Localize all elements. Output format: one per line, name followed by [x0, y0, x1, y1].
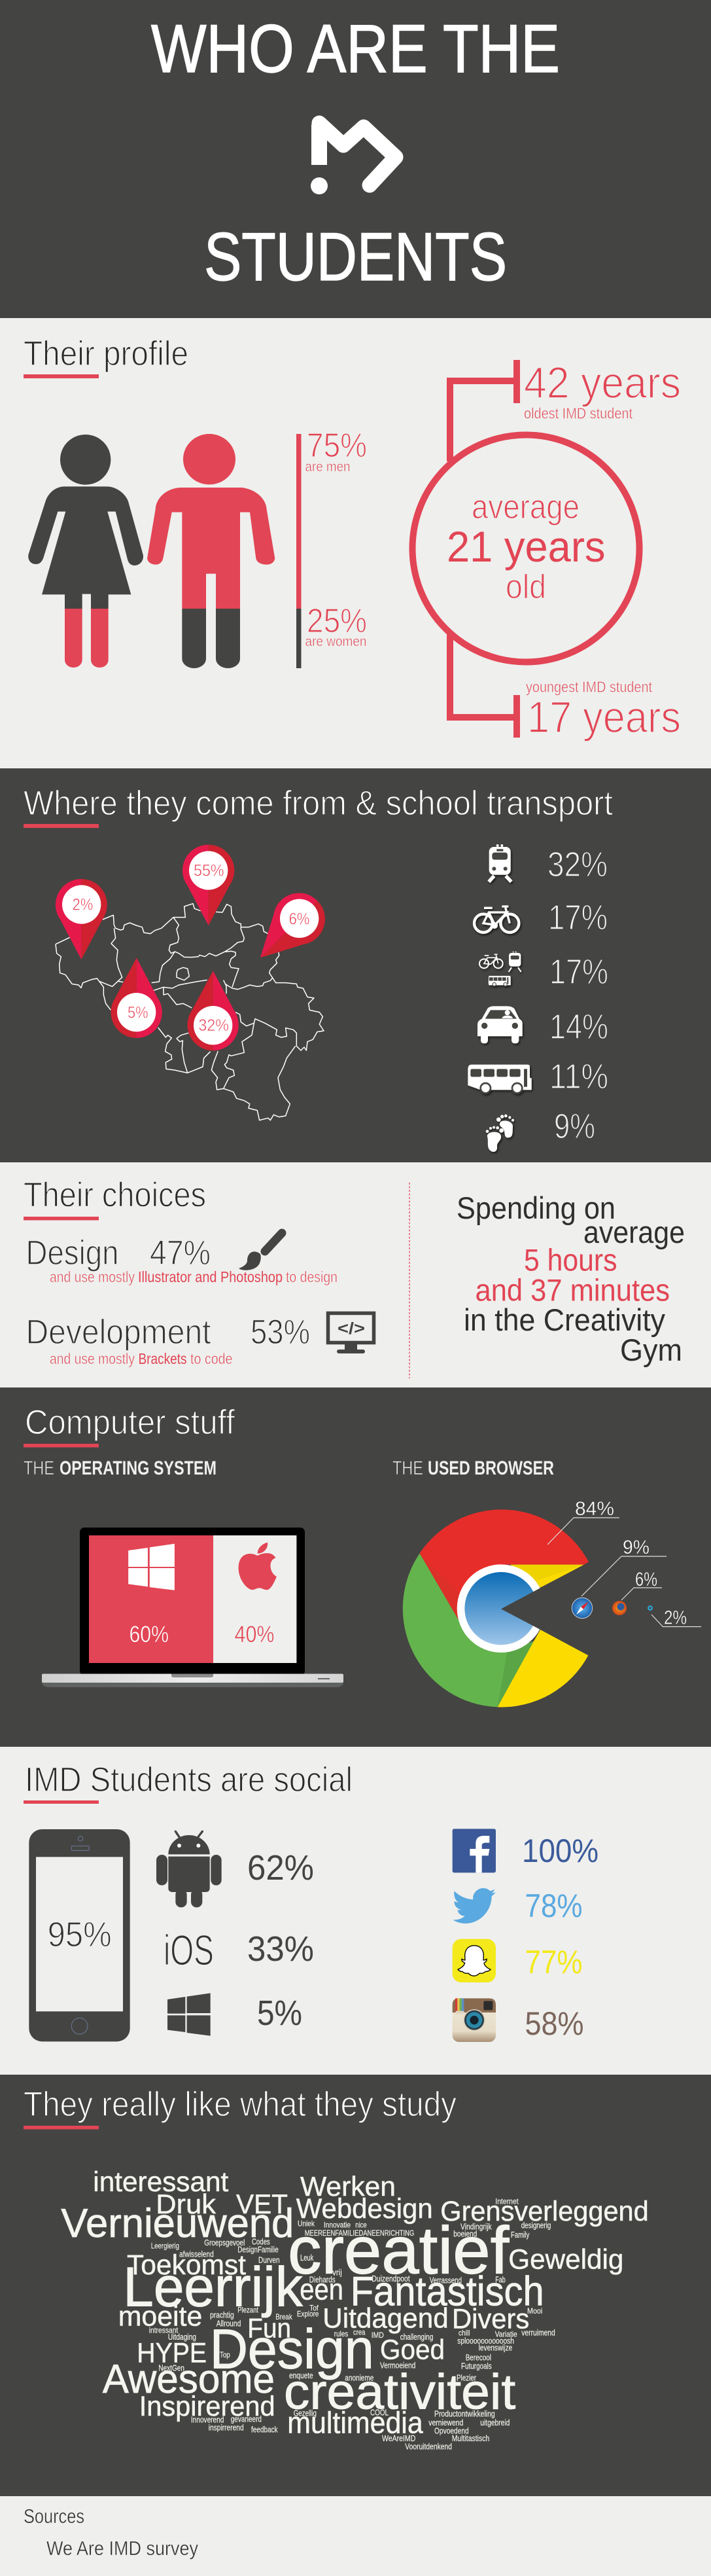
- icon: twitter: [453, 1888, 496, 1923]
- subheading: operating system: OPERATING SYSTEM: [60, 1458, 217, 1479]
- icon: firefox: [612, 1601, 627, 1615]
- word cloud: Vermoeiend: [380, 2360, 415, 2370]
- circle: average age: [412, 435, 640, 662]
- word cloud: VET: [236, 2189, 288, 2219]
- caption: design tools: [50, 1268, 338, 1285]
- subheading: used browser: [392, 1458, 554, 1479]
- stat: android 62%: 62%: [247, 1848, 314, 1887]
- word cloud: Innoverend: [191, 2416, 224, 2425]
- word cloud: [61, 2166, 649, 2451]
- stat: development 53%: 53%: [251, 1313, 310, 1351]
- heading underline: [24, 1217, 99, 1220]
- chart: OS share on laptop: [42, 1528, 343, 1687]
- heading: their profile: Their profile: [24, 334, 188, 373]
- word cloud: Geweldig: [508, 2244, 623, 2276]
- word cloud: enquete: [289, 2371, 313, 2380]
- word cloud: Verrassend: [430, 2275, 462, 2285]
- subheading: operating system: [24, 1458, 217, 1479]
- text: survey source: We Are IMD survey: [46, 2537, 198, 2560]
- callout: internet explorer 2%: [648, 1606, 701, 1628]
- word cloud: feedback: [251, 2425, 278, 2435]
- word cloud: Webdesign: [296, 2193, 433, 2225]
- word cloud: inspirrerend: [209, 2423, 244, 2432]
- stat: twitter 78%: 78%: [525, 1887, 582, 1924]
- word cloud: Break: [275, 2312, 293, 2321]
- icons: transport modes: [468, 844, 532, 1152]
- word cloud: Groepsgevoel: [204, 2238, 245, 2247]
- word cloud: Diehards: [309, 2274, 336, 2284]
- panel: their choices: [0, 1162, 711, 1387]
- caption: design tools: and use mostly: [50, 1268, 135, 1285]
- icon: windows phone: [167, 1993, 211, 2036]
- stat: youngest student: youngest IMD student: [526, 678, 653, 695]
- word cloud: Uitdagend: [322, 2303, 449, 2334]
- stat: 25% women: 25%: [307, 602, 367, 640]
- icon: train: [489, 844, 512, 882]
- word cloud: Vindingrijk: [460, 2222, 492, 2232]
- icon: car: [477, 1006, 523, 1043]
- word cloud: levenswijze: [479, 2344, 512, 2353]
- heading: where they come from: Where they come from & school transport: [24, 784, 613, 823]
- stat: 25% women: are women: [305, 634, 366, 649]
- word cloud: anonieme: [345, 2373, 373, 2382]
- callout: chrome 84%: 84%: [575, 1498, 614, 1520]
- callout: creativity gym time: Gym: [620, 1333, 682, 1367]
- caption: development tools: [50, 1350, 233, 1367]
- word cloud: Uitdaging: [168, 2333, 196, 2342]
- stat: 75% men: are men: [305, 459, 351, 474]
- title line: students: STUDENTS: [204, 219, 507, 295]
- word cloud: Toekomst: [127, 2249, 246, 2281]
- word cloud: nice: [355, 2220, 367, 2229]
- stats: transport percentages: [547, 845, 608, 1146]
- callout: firefox 6%: [612, 1569, 662, 1615]
- subheading: used browser: USED BROWSER: [428, 1458, 554, 1479]
- icon: facebook: [453, 1829, 496, 1872]
- word cloud: Leergierig: [151, 2242, 179, 2251]
- pin: 6%: 6%: [289, 911, 309, 929]
- word cloud: splooooooooooosh: [457, 2336, 514, 2346]
- word cloud: Leuk: [300, 2253, 314, 2263]
- icon: bicycle: [474, 906, 519, 933]
- pin: 2%: [56, 879, 107, 959]
- stat: instagram 58%: 58%: [525, 2005, 583, 2042]
- word cloud: Gezellig: [294, 2408, 317, 2418]
- stat: 75% men: 75%: [307, 427, 367, 465]
- word cloud: Vooruitdenkend: [405, 2442, 452, 2451]
- subheading: operating system: THE: [24, 1458, 54, 1479]
- stat: youngest student: 17 years: [527, 692, 681, 742]
- callout: creativity gym time: [457, 1190, 685, 1367]
- label: iOS: iOS: [164, 1925, 214, 1974]
- word cloud: moeite: [118, 2300, 202, 2332]
- stats: transport percentages: 17%: [549, 952, 608, 992]
- pin: 32%: 32%: [198, 1017, 229, 1035]
- bar: gender split: [296, 434, 301, 668]
- word cloud: Explore: [297, 2309, 319, 2318]
- word cloud: HYPE: [137, 2337, 207, 2369]
- subheading: used browser: THE: [392, 1458, 423, 1479]
- callout: firefox 6%: 6%: [635, 1569, 657, 1590]
- word cloud: Productontwikkeling: [434, 2409, 495, 2419]
- word cloud: Divers: [452, 2303, 529, 2334]
- word cloud: uitgebreid: [480, 2418, 510, 2427]
- word cloud: vrij: [332, 2268, 342, 2278]
- icon: bike train bus combination: [479, 952, 521, 986]
- icon: code monitor: [328, 1313, 374, 1353]
- word cloud: Durven: [258, 2255, 280, 2264]
- pin: 5%: [111, 957, 162, 1038]
- device: phone owners 95%: 95%: [48, 1916, 112, 1954]
- word cloud: chill: [459, 2329, 470, 2338]
- icon: safari: [572, 1598, 593, 1619]
- callout: creativity gym time: 5 hours: [524, 1242, 617, 1278]
- stat: oldest student: oldest IMD student: [524, 404, 633, 421]
- chart: browser share chrome pie: [403, 1510, 591, 1707]
- word cloud: Allround: [217, 2319, 241, 2328]
- panel: computer stuff: [0, 1387, 711, 1747]
- caption: development tools: Brackets: [139, 1350, 187, 1367]
- pin: 32%: [187, 971, 239, 1050]
- caption: design tools: to design: [286, 1268, 338, 1285]
- pin: 6%: [242, 882, 336, 976]
- word cloud: Fab: [495, 2274, 506, 2284]
- word cloud: Berecool: [466, 2353, 491, 2363]
- stat: development 53%: Development: [26, 1313, 211, 1351]
- stat: snapchat 77%: 77%: [525, 1944, 582, 1980]
- icon: bus: [468, 1065, 532, 1093]
- label: apple 40%: 40%: [234, 1622, 275, 1647]
- word cloud: Family: [511, 2230, 530, 2240]
- heading: their choices: Their choices: [24, 1175, 206, 1215]
- stat: design 47%: 47%: [150, 1234, 211, 1272]
- word cloud: een: [300, 2272, 343, 2306]
- word cloud: Duizendpoot: [372, 2274, 410, 2283]
- icon: paintbrush: [239, 1233, 282, 1270]
- icon: apple: [239, 1543, 277, 1590]
- callout: creativity gym time: and 37 minutes: [475, 1272, 670, 1308]
- caption: development tools: to code: [190, 1350, 233, 1367]
- heading underline: [24, 1444, 99, 1448]
- word cloud: intressant: [149, 2325, 179, 2334]
- icon: snapchat: [453, 1939, 496, 1982]
- heading: like what they study: They really like what they study: [24, 2085, 457, 2124]
- word cloud: Mooi: [527, 2306, 542, 2316]
- caption: design tools: Illustrator and Photoshop: [138, 1268, 283, 1285]
- word cloud: challenging: [400, 2333, 433, 2342]
- device: phone owners 95%: [29, 1829, 130, 2041]
- heading: sources: Sources: [24, 2505, 84, 2528]
- connector: oldest: [450, 360, 517, 461]
- word cloud: rules: [334, 2329, 348, 2338]
- stat: design 47%: [26, 1234, 211, 1272]
- stats: transport percentages: 14%: [549, 1007, 608, 1046]
- heading: social: IMD Students are social: [25, 1761, 353, 1799]
- callout: internet explorer 2%: 2%: [664, 1607, 687, 1628]
- word cloud: Grensverleggend: [440, 2196, 649, 2227]
- stats: transport percentages: 9%: [554, 1107, 595, 1146]
- callout: safari 9%: [572, 1537, 667, 1619]
- word cloud: Variatie: [495, 2330, 517, 2339]
- word cloud: Multitastisch: [452, 2434, 489, 2443]
- word cloud: Plezier: [457, 2372, 476, 2382]
- word cloud: Innovatie: [324, 2220, 351, 2229]
- word cloud: creativiteit: [284, 2365, 515, 2420]
- panel: header: [0, 0, 711, 318]
- panel: sources: [0, 2496, 711, 2576]
- word cloud: Fantastisch: [351, 2269, 544, 2315]
- word cloud: gevarieerd: [231, 2415, 262, 2424]
- heading underline: [24, 374, 99, 378]
- circle: average age: old: [506, 568, 546, 606]
- stat: windows 5%: 5%: [257, 1994, 302, 2033]
- icon: windows: [128, 1544, 175, 1590]
- callout: creativity gym time: in the Creativity: [464, 1302, 665, 1337]
- word cloud: COOL: [370, 2408, 389, 2418]
- word cloud: Top: [220, 2350, 230, 2359]
- word cloud: Druk: [156, 2189, 217, 2219]
- word cloud: Plezant: [237, 2305, 259, 2314]
- word cloud: MEEREENFAMILIEDANEENRICHTING: [305, 2230, 414, 2238]
- word cloud: Awesome: [103, 2357, 275, 2402]
- icon: woman and man figures: [28, 434, 275, 668]
- stat: facebook 100%: 100%: [522, 1833, 598, 1869]
- word cloud: multimedia: [287, 2405, 423, 2439]
- word cloud: Goed: [380, 2334, 445, 2365]
- stats: transport percentages: 11%: [549, 1057, 608, 1096]
- word cloud: Design: [210, 2318, 374, 2380]
- word cloud: Uniek: [298, 2219, 315, 2228]
- heading underline: [24, 824, 99, 828]
- word cloud: prachtig: [210, 2311, 234, 2320]
- caption: development tools: and use mostly: [50, 1350, 135, 1367]
- label: windows 60%: 60%: [130, 1622, 169, 1647]
- stats: transport percentages: 17%: [548, 898, 608, 937]
- pin: 5%: 5%: [128, 1005, 148, 1022]
- word cloud: WeAreIMD: [382, 2434, 415, 2443]
- icon: code monitor: </>: [338, 1319, 365, 1338]
- word cloud: interessant: [93, 2166, 228, 2198]
- icon: android: [156, 1831, 222, 1907]
- word cloud: DesignFamilie: [237, 2245, 279, 2255]
- stat: design 47%: Design: [26, 1234, 119, 1272]
- stat: iOS 33%: 33%: [247, 1929, 314, 1969]
- callout: creativity gym time: average: [583, 1215, 685, 1249]
- icon: IMD logo: [311, 123, 396, 194]
- heading: computer stuff: Computer stuff: [25, 1403, 235, 1442]
- word cloud: afwisselend: [179, 2250, 214, 2259]
- word cloud: Opvoedend: [434, 2426, 469, 2435]
- word cloud: Inspirerend: [139, 2391, 275, 2422]
- word cloud: Codes: [252, 2236, 270, 2246]
- panel: imd students are social: [0, 1747, 711, 2075]
- word cloud: designerig: [521, 2220, 551, 2230]
- word cloud: boeiend: [453, 2229, 477, 2239]
- word cloud: verniewend: [428, 2418, 463, 2427]
- word cloud: Futurgoals: [461, 2361, 492, 2370]
- word cloud: Vernieuwend: [61, 2201, 294, 2246]
- icon: footprints: [486, 1115, 514, 1152]
- heading underline: [24, 2126, 99, 2130]
- callout: chrome 84%: [547, 1498, 619, 1545]
- panel: they really like what they study: [0, 2075, 711, 2496]
- pin: 55%: [182, 845, 234, 925]
- word cloud: Fun: [247, 2313, 291, 2344]
- word cloud: Internet: [495, 2197, 519, 2206]
- map: Belgium provinces with pins: [56, 845, 336, 1120]
- callout: safari 9%: 9%: [623, 1537, 650, 1558]
- pin: 2%: 2%: [73, 897, 93, 914]
- word cloud: Tof: [309, 2304, 319, 2313]
- stat: oldest student: 42 years: [524, 358, 681, 408]
- title line: who are the: WHO ARE THE: [151, 11, 560, 87]
- icon: instagram: [453, 1998, 496, 2042]
- word cloud: IMD: [372, 2331, 384, 2340]
- word cloud: creatief: [288, 2213, 510, 2287]
- stats: transport percentages: 32%: [547, 845, 608, 884]
- panel: their profile: [0, 318, 711, 768]
- word cloud: Werken: [300, 2171, 396, 2202]
- word cloud: NextGen: [158, 2363, 184, 2373]
- pin: 55%: 55%: [194, 862, 224, 880]
- heading underline: [24, 1800, 99, 1804]
- word cloud: crea: [353, 2328, 366, 2337]
- callout: creativity gym time: Spending on: [457, 1190, 616, 1225]
- word cloud: verruimend: [521, 2329, 555, 2338]
- icon: internet explorer: [648, 1606, 652, 1610]
- word cloud: Leerrijk: [123, 2256, 303, 2318]
- panel: where they come from and school transport: [0, 768, 711, 1162]
- circle: average age: average: [472, 488, 580, 526]
- connector: youngest: [450, 635, 517, 738]
- circle: average age: 21 years: [447, 522, 606, 571]
